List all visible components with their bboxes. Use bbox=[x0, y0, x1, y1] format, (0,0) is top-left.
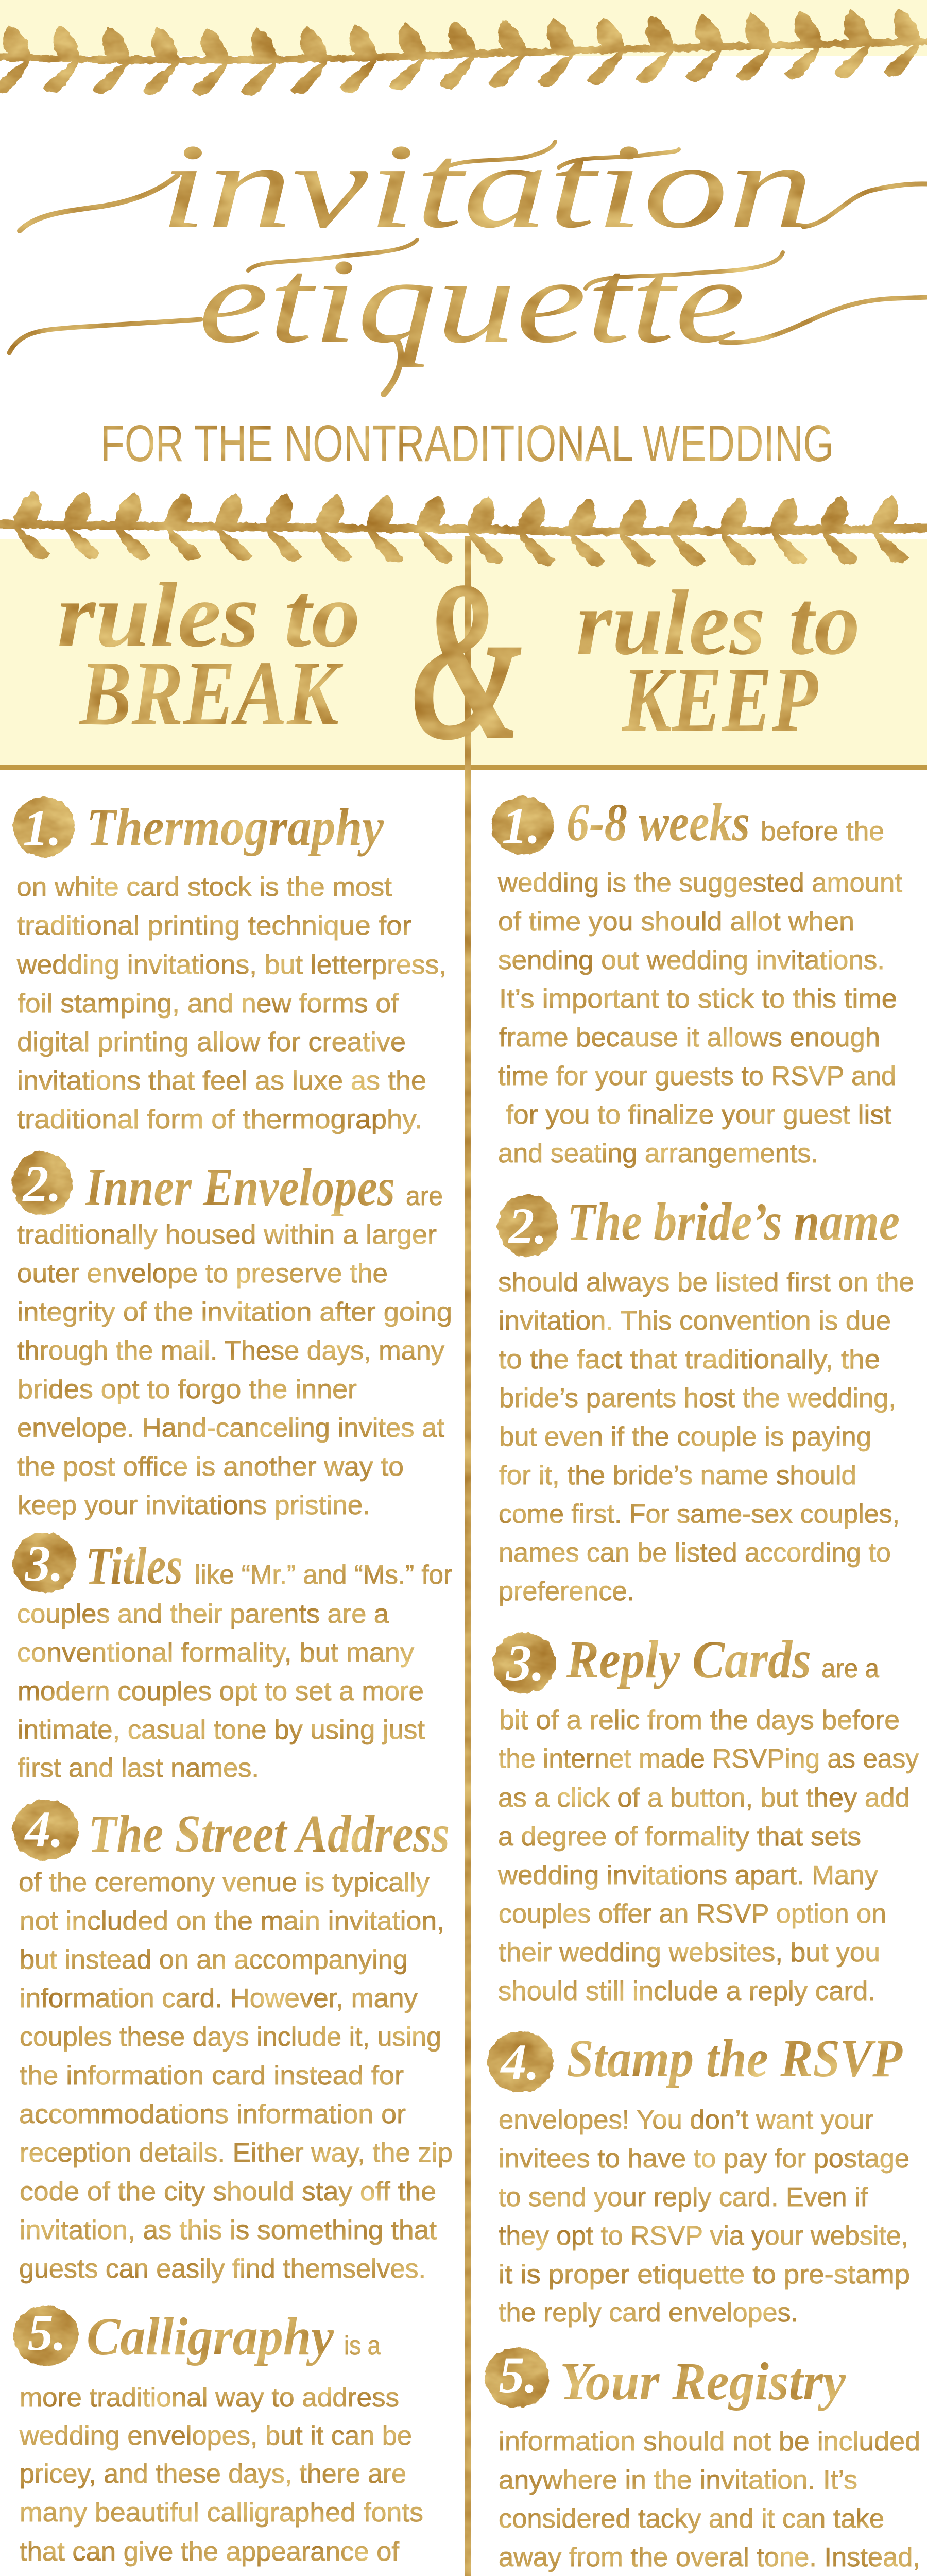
text block bbox=[17, 1181, 452, 1520]
text block: considered tacky and it can take bbox=[499, 2504, 884, 2534]
text block: the post office is another way to bbox=[17, 1452, 404, 1482]
text block bbox=[19, 1868, 453, 2284]
text block: for you to finalize your guest list bbox=[506, 1100, 892, 1130]
panel: break rule 2 inner envelopes bbox=[12, 1151, 452, 1520]
text block: preference. bbox=[499, 1577, 634, 1606]
text block: many beautiful calligraphed fonts bbox=[20, 2498, 423, 2528]
panel: keep rule 4 stamp the rsvp bbox=[488, 2029, 910, 2328]
heading: Stamp the RSVP: Stamp the RSVP bbox=[566, 2029, 903, 2088]
text block: as a click of a button, but they add bbox=[498, 1783, 910, 1813]
text block: wedding envelopes, but it can be bbox=[19, 2421, 412, 2451]
text block: information card. However, many bbox=[20, 1984, 418, 2013]
text block bbox=[19, 2331, 437, 2576]
title word: invitation bbox=[20, 119, 927, 253]
text block: for it, the bride’s name should bbox=[499, 1461, 856, 1490]
heading: rules to break: BREAK bbox=[79, 642, 344, 744]
text block: but even if the couple is paying bbox=[499, 1422, 871, 1452]
text block: the information card instead for bbox=[20, 2061, 404, 2091]
text block: the internet made RSVPing as easy bbox=[499, 1744, 919, 1774]
text block: are a bbox=[821, 1654, 879, 1684]
text block: foil stamping, and new forms of bbox=[18, 989, 399, 1019]
text block: bit of a relic from the days before bbox=[499, 1705, 900, 1735]
text block bbox=[497, 1654, 919, 2006]
text block: that can give the appearance of bbox=[20, 2537, 400, 2567]
text block: code of the city should stay off the bbox=[20, 2177, 436, 2207]
icon: number 2 badge: 2. bbox=[22, 1155, 62, 1212]
text block bbox=[498, 1267, 914, 1606]
icon: number 4 badge bbox=[13, 1800, 79, 1860]
ampersand: & bbox=[411, 534, 523, 788]
second laurel garland bbox=[0, 492, 927, 567]
text block: before the bbox=[761, 817, 884, 846]
vertical gold divider bbox=[465, 536, 471, 2576]
heading: Thermography: Thermography bbox=[87, 798, 384, 857]
text block: of time you should allot when bbox=[498, 907, 854, 937]
text block: invitations that feel as luxe as the bbox=[17, 1066, 426, 1096]
icon: number 2 badge bbox=[12, 1151, 72, 1215]
icon: number 4 badge: 4. bbox=[500, 2033, 540, 2091]
text block: brides opt to forgo the inner bbox=[18, 1375, 357, 1404]
text block: accommodations information or bbox=[19, 2099, 406, 2129]
text block: traditional form of thermography. bbox=[17, 1105, 422, 1134]
text block: envelope. Hand-canceling invites at bbox=[17, 1413, 445, 1443]
header panel cream background bbox=[0, 539, 927, 765]
text block: of the ceremony venue is typically bbox=[19, 1868, 430, 1897]
text block: keep your invitations pristine. bbox=[18, 1490, 370, 1520]
icon: number 5 badge: 5. bbox=[28, 2304, 66, 2361]
title word: invitation: invitation bbox=[160, 119, 814, 253]
heading: 6-8 weeks: 6-8 weeks bbox=[566, 793, 750, 852]
panel: keep rule 3 reply cards bbox=[493, 1630, 919, 2006]
top laurel garland bbox=[0, 9, 927, 96]
heading: rules to keep bbox=[576, 571, 860, 751]
panel: break rule 5 calligraphy bbox=[13, 2304, 437, 2576]
text block: are bbox=[406, 1181, 443, 1211]
text block: guests can easily find themselves. bbox=[19, 2254, 426, 2284]
text block: should still include a reply card. bbox=[498, 1976, 876, 2006]
text block bbox=[16, 872, 447, 1134]
horizontal gold rule bbox=[0, 765, 927, 770]
heading: The Street Address: The Street Address bbox=[88, 1804, 450, 1863]
heading: Calligraphy: Calligraphy bbox=[87, 2307, 334, 2366]
icon: number 3 badge bbox=[13, 1533, 76, 1594]
icon: number 3 badge bbox=[493, 1633, 556, 1693]
text block: intimate, casual tone by using just bbox=[18, 1715, 425, 1745]
text block: invitation. This convention is due bbox=[499, 1306, 891, 1336]
text block: on white card stock is the most bbox=[16, 872, 392, 902]
text block: frame because it allows enough bbox=[499, 1023, 880, 1053]
text block: time for your guests to RSVP and bbox=[498, 1061, 896, 1091]
heading: rules to break bbox=[57, 564, 360, 744]
text block: their wedding websites, but you bbox=[499, 1938, 880, 1968]
text block: and seating arrangements. bbox=[498, 1139, 818, 1168]
text block: names can be listed according to bbox=[499, 1538, 891, 1568]
icon: number 4 badge: 4. bbox=[24, 1801, 64, 1858]
text block: to send your reply card. Even if bbox=[499, 2182, 868, 2212]
text block: they opt to RSVP via your website, bbox=[499, 2221, 908, 2251]
text block bbox=[499, 2105, 910, 2328]
panel: break rule 1 thermography bbox=[13, 797, 447, 1134]
text block: like “Mr.” and “Ms.” for bbox=[195, 1560, 452, 1590]
text block: It’s important to stick to this time bbox=[499, 984, 897, 1014]
text block: wedding is the suggested amount bbox=[497, 868, 903, 898]
text block: invitation, as this is something that bbox=[20, 2215, 437, 2245]
text block: but instead on an accompanying bbox=[20, 1945, 408, 1975]
icon: number 5 badge bbox=[485, 2346, 550, 2408]
text block: traditionally housed within a larger bbox=[17, 1220, 437, 1250]
text block: couples these days include it, using bbox=[20, 2022, 441, 2052]
text block: invitees to have to pay for postage bbox=[499, 2144, 909, 2174]
panel: break rule 3 titles bbox=[13, 1533, 452, 1783]
text block: anywhere in the invitation. It’s bbox=[499, 2465, 857, 2495]
text block: not included on the main invitation, bbox=[20, 1906, 444, 1936]
text block: to the fact that traditionally, the bbox=[499, 1345, 880, 1375]
icon: number 4 badge bbox=[488, 2031, 554, 2092]
text block: wedding invitations, but letterpress, bbox=[16, 950, 447, 980]
text block: is a bbox=[344, 2331, 381, 2361]
icon: number 3 badge: 3. bbox=[25, 1535, 64, 1592]
heading: rules to keep: rules to bbox=[576, 571, 860, 674]
text block: bride’s parents host the wedding, bbox=[499, 1383, 896, 1413]
text block: through the mail. These days, many bbox=[17, 1336, 444, 1366]
text block: should always be listed first on the bbox=[498, 1267, 914, 1297]
icon: number 2 badge bbox=[498, 1194, 558, 1257]
text block: modern couples opt to set a more bbox=[18, 1676, 424, 1706]
icon: number 1 badge: 1. bbox=[502, 797, 541, 854]
title: invitation etiquette bbox=[9, 119, 927, 394]
title word: etiquette bbox=[9, 234, 927, 394]
text block: wedding invitations apart. Many bbox=[497, 1860, 878, 1890]
heading: rules to break: rules to bbox=[57, 564, 360, 666]
text block: sending out wedding invitations. bbox=[498, 945, 885, 975]
text block: more traditional way to address bbox=[20, 2383, 399, 2413]
text block: information should not be included bbox=[499, 2427, 920, 2456]
icon: number 5 badge: 5. bbox=[499, 2346, 538, 2403]
panel: keep rule 5 your registry bbox=[485, 2346, 920, 2576]
text block bbox=[17, 1560, 452, 1783]
text block: a degree of formality that sets bbox=[498, 1822, 861, 1852]
top cream band bbox=[0, 0, 927, 56]
text block: come first. For same-sex couples, bbox=[499, 1499, 900, 1529]
text block: it is proper etiquette to pre-stamp bbox=[499, 2260, 910, 2290]
text block: conventional formality, but many bbox=[17, 1638, 414, 1668]
text block: away from the overal tone. Instead, bbox=[499, 2543, 920, 2572]
icon: number 1 badge bbox=[13, 797, 75, 857]
heading: Titles: Titles bbox=[85, 1536, 183, 1596]
text block: couples and their parents are a bbox=[17, 1599, 389, 1629]
icon: number 1 badge bbox=[491, 796, 554, 855]
text block: integrity of the invitation after going bbox=[17, 1297, 452, 1327]
heading: Your Registry: Your Registry bbox=[560, 2352, 846, 2411]
icon: number 5 badge bbox=[13, 2304, 78, 2366]
text block bbox=[498, 2427, 920, 2576]
text block: envelopes! You don’t want your bbox=[499, 2105, 873, 2135]
text block: reception details. Either way, the zip bbox=[20, 2138, 453, 2168]
text block: first and last names. bbox=[18, 1753, 259, 1783]
icon: number 1 badge: 1. bbox=[23, 799, 62, 856]
text block: the reply card envelopes. bbox=[499, 2298, 798, 2328]
title word: etiquette: etiquette bbox=[198, 234, 745, 368]
text block: digital printing allow for creative bbox=[17, 1027, 406, 1057]
heading: Reply Cards: Reply Cards bbox=[566, 1630, 811, 1689]
icon: number 2 badge: 2. bbox=[508, 1197, 547, 1255]
text block: traditional printing technique for bbox=[17, 911, 411, 941]
text block: outer envelope to preserve the bbox=[17, 1259, 388, 1289]
text block: couples offer an RSVP option on bbox=[499, 1899, 886, 1929]
heading: rules to keep: KEEP bbox=[621, 648, 819, 751]
panel: keep rule 1 six to eight weeks bbox=[491, 793, 903, 1168]
heading: Inner Envelopes: Inner Envelopes bbox=[84, 1158, 395, 1217]
text block: pricey, and these days, there are bbox=[20, 2459, 406, 2489]
text block bbox=[497, 817, 903, 1168]
panel: keep rule 2 the bride's name bbox=[498, 1192, 914, 1606]
panel: break rule 4 street address bbox=[13, 1800, 453, 2284]
icon: number 3 badge: 3. bbox=[506, 1634, 545, 1691]
